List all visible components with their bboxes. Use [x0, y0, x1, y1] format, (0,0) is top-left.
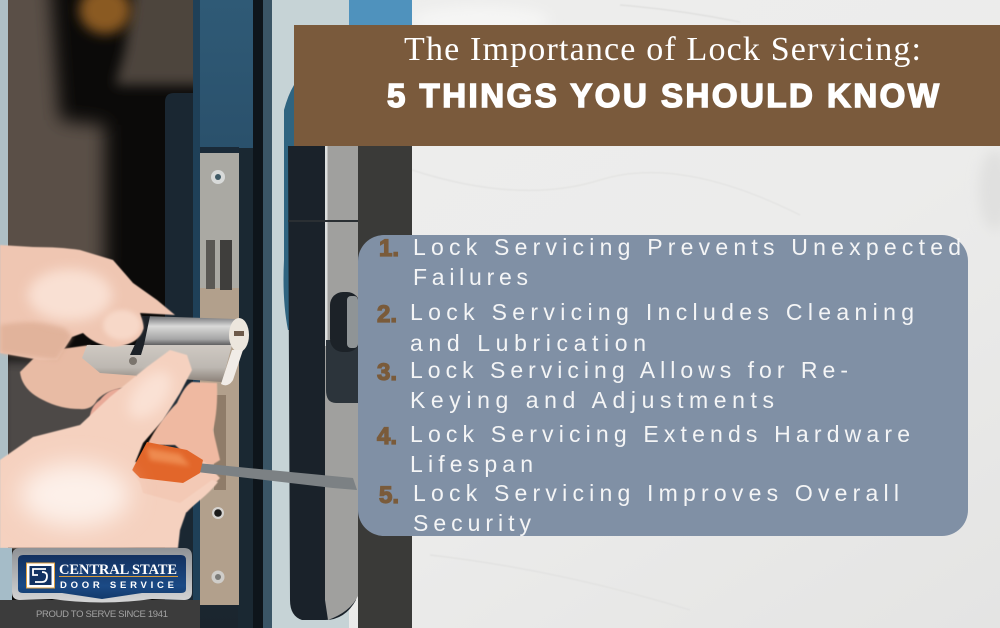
item 3: Lock Servicing Allows for Re- [410, 357, 848, 383]
photo: lower hand highlight [20, 463, 130, 527]
item 5: 5. [379, 482, 399, 509]
item 2: 2. [377, 301, 397, 328]
item 1: Failures [413, 264, 528, 290]
item 4 [377, 421, 910, 477]
photo: lock cylinder [82, 316, 249, 385]
photo: dark strip beneath logo [0, 600, 200, 628]
logo: Central State Door Service [12, 548, 192, 620]
title line 2: 5 THINGS YOU SHOULD KNOW [387, 77, 940, 114]
item 3 [377, 357, 848, 413]
item 2 [377, 299, 914, 356]
door photo: locksmith servicing a lock [0, 0, 412, 628]
photo: door edge plate and knob [288, 146, 412, 628]
photo: lower hand and thumb [0, 350, 218, 548]
logo emblem [26, 563, 54, 588]
photo: thumb highlight [120, 363, 180, 427]
logo wordmark: Door Service: DOOR SERVICE [60, 580, 174, 591]
item 4: 4. [377, 423, 397, 450]
item 4: Lock Servicing Extends Hardware [410, 421, 910, 447]
title banner [294, 25, 1000, 146]
photo: small fingertips under the cylinder [90, 389, 135, 425]
photo: thumbnail on index finger [103, 310, 141, 340]
item 3: 3. [377, 359, 397, 386]
item 1: 1. [379, 235, 399, 262]
photo: upper hand highlight [28, 269, 112, 321]
logo tagline: PROUD TO SERVE SINCE 1941 [36, 609, 168, 620]
photo: upper hand with index finger [0, 245, 175, 360]
item 2: and Lubrication [410, 330, 646, 356]
photo: palm beneath screwdriver [128, 462, 220, 512]
logo badge [12, 548, 192, 602]
item 5: Lock Servicing Improves Overall [413, 480, 899, 506]
panel: five things list [358, 234, 968, 536]
item 4: Lifespan [410, 451, 533, 477]
item 3: Keying and Adjustments [410, 387, 774, 413]
photo: silver lock faceplate [200, 147, 239, 605]
logo gold rule [59, 576, 178, 577]
item 1: Lock Servicing Prevents Unexpected [413, 234, 961, 260]
photo: blurred room background [0, 0, 220, 628]
logo wordmark: Central State: CENTRAL STATE [59, 562, 177, 578]
photo: back fingers of upper hand [20, 345, 137, 409]
photo: blue door frame [193, 0, 412, 628]
photo: screwdriver [132, 442, 357, 490]
photo: fingers behind screwdriver [147, 382, 220, 470]
logo blue field [18, 555, 186, 599]
item 1 [379, 234, 961, 290]
photo: upper hand shading [0, 322, 72, 360]
item 2: Lock Servicing Includes Cleaning [410, 299, 914, 325]
item 5: Security [413, 510, 532, 536]
title line 1: The Importance of Lock Servicing: [404, 31, 921, 68]
photo: pale strip beside logo [0, 548, 12, 602]
item 5 [379, 480, 899, 536]
